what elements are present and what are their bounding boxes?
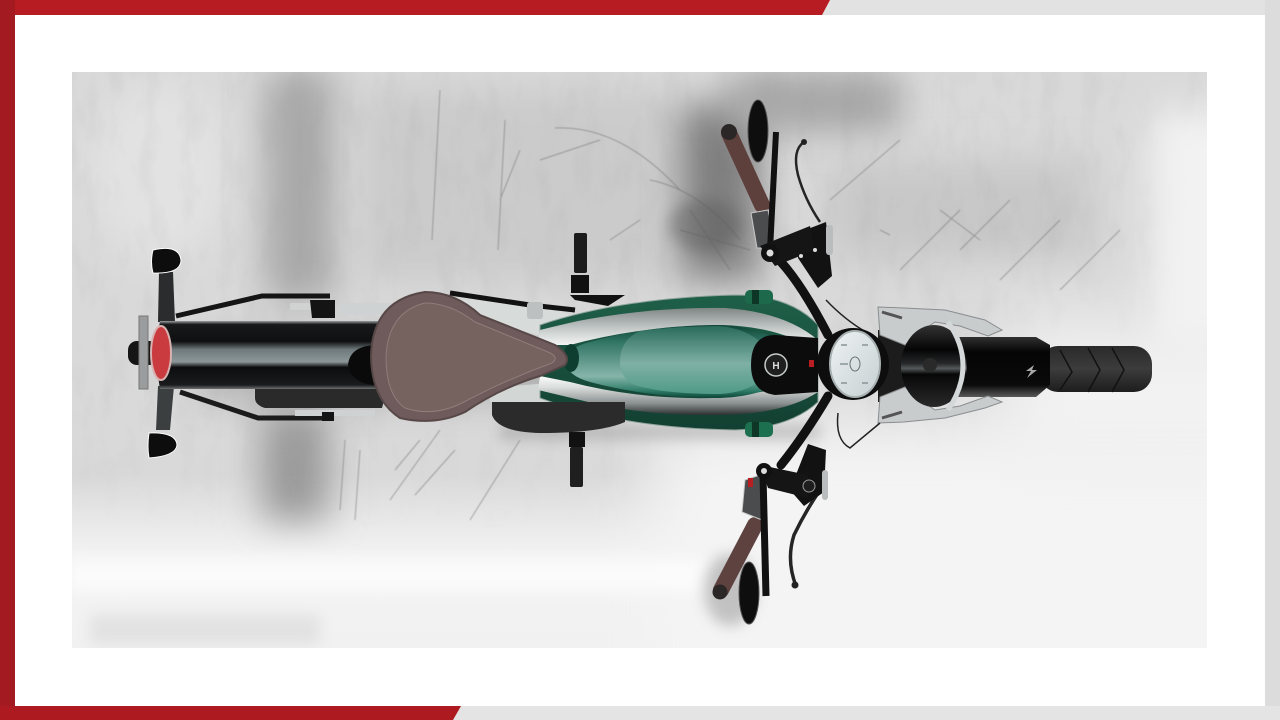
tank inner green panel: [565, 325, 800, 398]
grey patch lower left: [90, 615, 320, 645]
tank chrome band bottom: [538, 376, 818, 415]
tank cap bottom: [745, 422, 773, 437]
tail light: [151, 326, 171, 380]
bright floor right side: [998, 302, 1207, 433]
rear fender: [157, 321, 385, 389]
tank filler bolt: [527, 302, 543, 319]
front fender with lightning mark: [955, 337, 1050, 397]
lower switch pod: [742, 474, 763, 520]
chrome side panel under seat, bottom: [490, 382, 620, 414]
tank top console with power button: [751, 335, 818, 395]
right footpeg: [569, 432, 585, 487]
photo panel: concrete floor: [72, 72, 1207, 648]
bright floor lower right: [633, 398, 1207, 536]
concrete grain texture: [72, 72, 1207, 648]
upper lever tip: [801, 139, 807, 145]
chrome side panel under seat, top: [440, 298, 600, 342]
handlebar upper tube: [781, 262, 828, 335]
lower switch red button: [748, 478, 753, 487]
cast shadow under motorcycle: [500, 425, 820, 439]
upper rail behind seat: [450, 293, 575, 310]
cast shadow under lower handlebar: [704, 554, 756, 626]
front fork and chrome brackets: [878, 307, 1002, 423]
instrument dial: [830, 331, 880, 397]
tank top console with power button: H: [772, 361, 780, 372]
frame: grey top bar: [820, 0, 1280, 15]
motorcycle top view: [128, 100, 1152, 624]
turn signal stalk lower: [156, 386, 174, 430]
rear shock mount upper: [290, 300, 400, 318]
tank inner lighter pane: [620, 326, 775, 394]
instrument cluster mount: [817, 328, 889, 400]
turn signal lower: [148, 433, 177, 458]
lower grip end: [712, 584, 728, 600]
frame: red bottom bar: [0, 706, 461, 720]
frame: red top bar: [0, 0, 830, 15]
lower lever tip: [792, 582, 798, 588]
bright patch far right: [1140, 100, 1207, 334]
licence plate: [139, 316, 148, 389]
front tyre: [1040, 346, 1152, 392]
tank nose near seat: [563, 344, 579, 372]
lower lever perch: [756, 444, 828, 506]
rear frame rail lower: [180, 392, 332, 418]
upper switch pod: [751, 210, 775, 248]
pale streak lower left: [79, 568, 637, 584]
turn signal upper: [152, 248, 181, 273]
tank chrome band top: [538, 308, 818, 352]
fuel tank outer shell: [540, 295, 818, 430]
brake cable upper: [826, 300, 866, 332]
frame: red left bar: [0, 0, 15, 720]
lower mirror stalk: [763, 475, 766, 596]
lower brake lever: [790, 490, 820, 586]
upper mirror: [748, 100, 768, 162]
battery box lower mid: [492, 402, 625, 433]
floor scratches: [340, 90, 1120, 520]
upper grip: [729, 133, 762, 205]
floor smudge near handlebar: [669, 199, 741, 251]
brake cable lower: [838, 413, 880, 448]
left footpeg: [570, 233, 625, 306]
frame: grey bottom bar: [450, 706, 1280, 720]
seat shadow: [348, 345, 378, 385]
headlamp dome: [901, 322, 967, 410]
rear frame rail upper: [176, 296, 330, 316]
tank cap top: [745, 290, 773, 304]
upper grip end: [721, 124, 737, 140]
lower grip: [721, 525, 755, 590]
turn signal stalk upper: [158, 272, 175, 322]
upper clutch lever: [796, 142, 820, 222]
handlebar lower tube: [781, 396, 828, 465]
rear shock mount lower: [295, 410, 375, 421]
tail stub: [128, 341, 158, 365]
frame: grey right bar: [1265, 0, 1280, 720]
upper mirror stalk: [770, 132, 776, 250]
lower mirror: [739, 562, 759, 624]
battery box lower rear: [255, 389, 387, 408]
upper lever perch: [760, 222, 833, 288]
seat: [371, 292, 567, 421]
